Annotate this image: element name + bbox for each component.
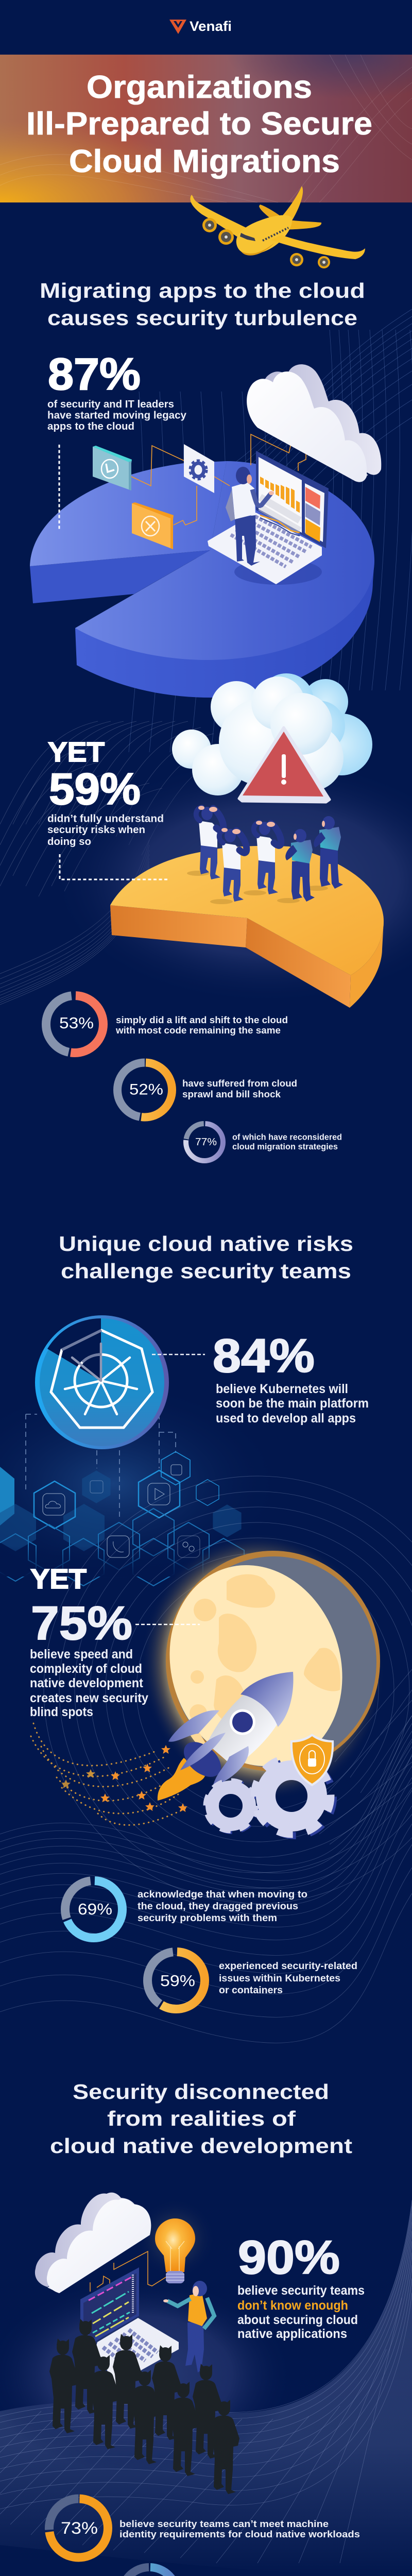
icon: clock panel [93,446,132,490]
stat: YET 59%: YET [48,737,105,768]
stat description: believe security teams [237,2283,365,2298]
pie: large slice [75,461,374,698]
hexagon icons [43,1465,200,1557]
icon: puffy cloud with warning [172,673,372,802]
heading: section 2: Unique cloud native risks [59,1232,353,1256]
icon: isometric cloud top right [247,364,381,482]
stat description: used to develop all apps [216,1411,356,1426]
laptop [208,451,329,585]
heading: section 3: from realities of [107,2107,296,2130]
donut: 53%: 53% [59,1014,94,1032]
stat description: didn’t fully understand [47,813,164,824]
background mesh: upper right [129,309,412,752]
donut 73% caption [119,2518,360,2539]
stat: 87% [47,349,187,432]
heading: section 1: Migrating apps to the cloud [40,279,365,302]
heading: section 3: cloud native development [50,2134,352,2158]
stat description: soon be the main platform [216,1396,369,1411]
donut: 69%: 69% [78,1900,112,1918]
donut: 52% [117,1062,172,1117]
stat: 84% [152,1330,369,1426]
stat: 87%: 87% [48,349,141,399]
icon: warning triangle [239,727,330,802]
donut 69% caption: acknowledge that when moving to [138,1889,307,1900]
donut 59% caption: experienced security-related [219,1961,357,1972]
heading: section 1: causes security turbulence [47,306,357,330]
donut 73% caption: believe security teams can’t meet machine [119,2518,329,2529]
dashed connector [60,854,169,879]
heading: section 3 [50,2080,352,2158]
donut 59% caption: issues within Kubernetes [219,1973,340,1984]
pie: small slice [30,461,227,603]
icon: shield [290,1734,334,1786]
blue pie chart with laptop [30,434,374,698]
donut: 77% [186,1124,223,1161]
donut: 52%: 52% [129,1081,163,1098]
icon: isometric cloud [35,2193,151,2293]
stat: 84%: 84% [213,1330,315,1382]
audience silhouettes [49,2319,239,2494]
donut 59% caption [219,1961,357,1996]
wires [131,434,306,525]
stat: YET 75%: 75% [31,1597,132,1650]
icon: close panel [132,502,174,549]
hero title [26,70,372,179]
top logo: Venafi [169,19,232,34]
stat description: creates new security [30,1691,148,1705]
icon: rocket [31,1655,312,1825]
stat: YET 59%: 59% [49,765,141,814]
donut: 73% [49,2499,108,2557]
background mesh: around 59% [0,721,239,1005]
stat description [47,813,164,848]
stat description: don’t know enough [237,2298,348,2313]
stat description: blind spots [30,1705,93,1719]
illustration: team and laptop [35,2193,239,2494]
donut 52% caption [182,1078,297,1099]
stat description: about securing cloud [237,2313,358,2327]
donut 69% caption: the cloud, they dragged previous [138,1901,298,1912]
donut 53% caption: with most code remaining the same [115,1025,281,1036]
donut 53% caption: simply did a lift and shift to the cloud [116,1015,288,1025]
hexagon network [0,1414,258,1586]
donut: 59% [147,1952,205,2009]
background wave floor [0,2200,412,2576]
donut: 53% [46,995,103,1053]
heading: section 2 [59,1232,353,1283]
stat description: native applications [237,2327,347,2341]
donut: 68% [122,2567,177,2576]
person at laptop [226,467,274,566]
stat description [47,399,187,432]
donut 59% caption: or containers [219,1985,283,1996]
glow behind hexagons [0,1381,283,1587]
donut 77% caption: cloud migration strategies [232,1142,338,1151]
stat description: complexity of cloud [30,1662,142,1676]
stat: 90% [237,2231,365,2341]
hero title: Organizations [87,70,312,105]
hero title: Cloud Migrations [69,144,340,179]
hero banner [0,55,412,202]
stat description: believe Kubernetes will [216,1382,348,1396]
donut 69% caption [138,1889,307,1924]
stat description: security risks when [47,824,145,836]
donut 77% caption: of which have reconsidered [232,1132,342,1142]
top logo: Venafi: Venafi [190,19,232,34]
rocket trail [31,1723,185,1825]
icon: gears [207,1758,333,1836]
yellow pie chart with people [60,806,384,1008]
stat description [216,1382,369,1426]
stat: YET 75% [30,1564,148,1719]
stat description: have started moving legacy [47,410,187,421]
stat: YET 75%: YET [30,1564,87,1595]
stat description: believe speed and [30,1647,133,1662]
presenter [163,2281,214,2372]
donut: 73%: 73% [61,2519,98,2537]
dashed connector [59,445,60,530]
donut 52% caption: sprawl and bill shock [182,1089,281,1099]
donut 53% caption [115,1015,288,1036]
stat description: doing so [47,836,91,848]
background mesh: around moon [0,1476,412,2043]
heading: section 3: Security disconnected [73,2080,329,2104]
heading: section 1 [40,279,365,330]
stat description: native development [30,1676,144,1690]
stat description: apps to the cloud [47,421,134,432]
icon: gear panel [184,444,214,493]
donut: 69% [65,1880,123,1938]
dashed connector [135,1624,200,1625]
stat: 90%: 90% [238,2231,340,2284]
laptop with code [80,2267,179,2391]
stat description [237,2283,365,2341]
glow behind yellow pie [52,757,412,1005]
moon with rocket and gears [31,1511,409,1836]
Kubernetes badge [35,1315,169,1449]
stars [61,1745,197,1812]
donut: 77%: 77% [195,1137,217,1148]
stat description [30,1647,148,1719]
donut 77% caption [232,1132,342,1151]
icon: yellow airplane [190,186,365,268]
icon: glowing bulb [135,2198,215,2283]
donut 69% caption: security problems with them [138,1913,277,1924]
people group [187,806,343,904]
donut 52% caption: have suffered from cloud [182,1078,297,1089]
Kubernetes heptagon [51,1330,152,1428]
donut 73% caption: identity requirements for cloud native workloads [119,2529,360,2539]
stat: YET 59% [47,737,164,848]
stat description: of security and IT leaders [47,399,174,410]
donut: 59%: 59% [160,1972,195,1990]
moon craters [188,1574,340,1762]
wires [90,2251,166,2292]
heading: section 2: challenge security teams [61,1259,351,1283]
hero title: Ill-Prepared to Secure [26,106,372,142]
